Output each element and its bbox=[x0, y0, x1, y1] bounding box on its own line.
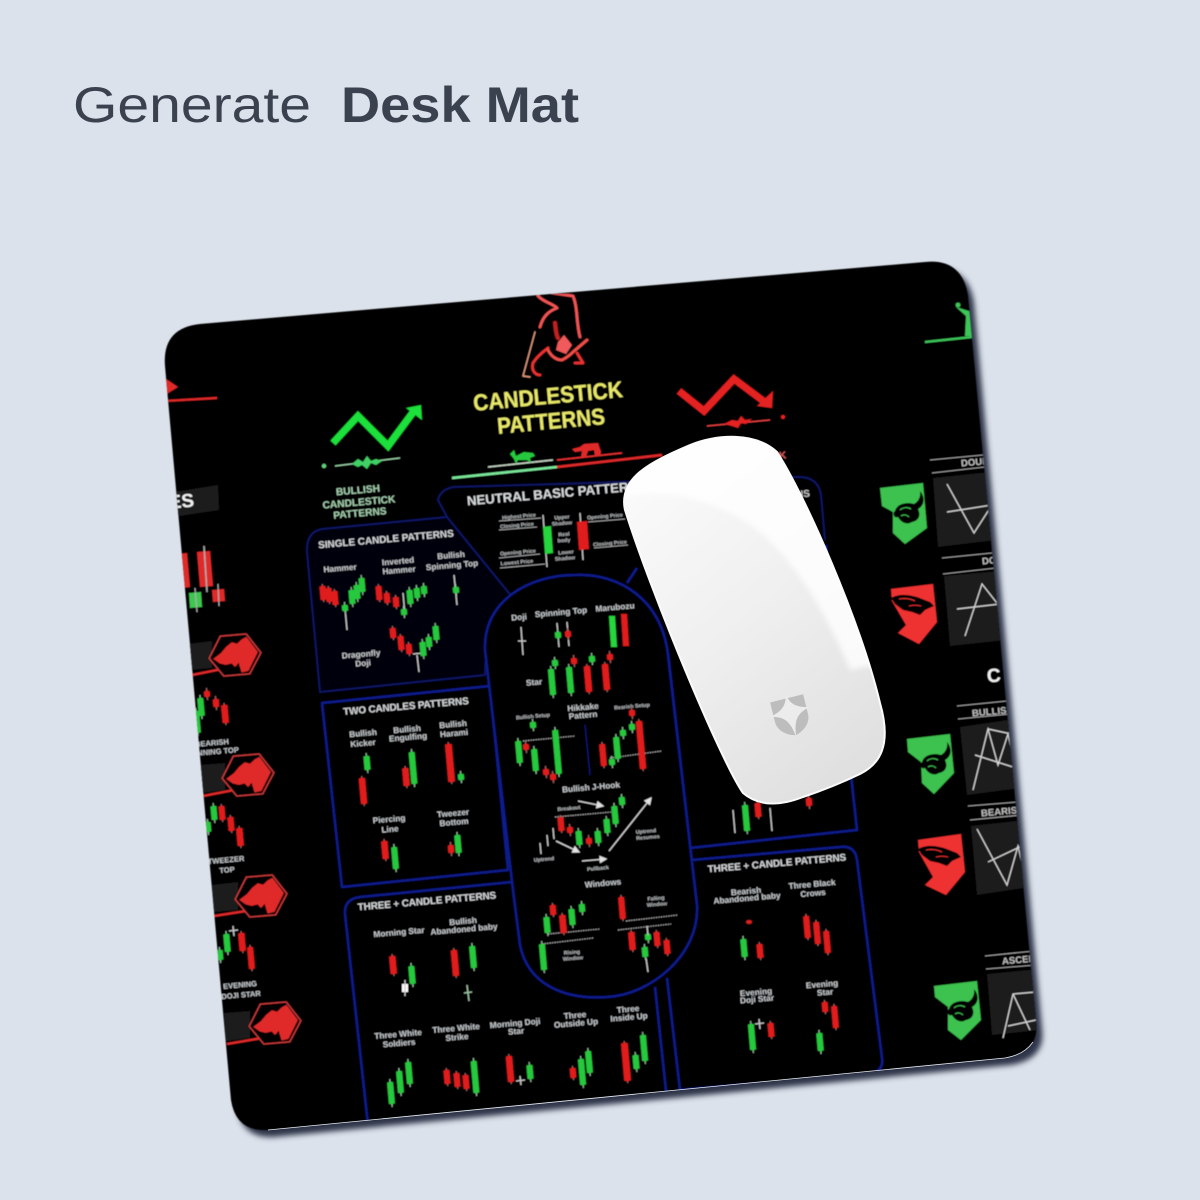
candles bbox=[740, 914, 839, 1054]
right edge: shield badges bbox=[880, 483, 981, 1040]
panel: three + candle patterns right bbox=[667, 847, 882, 1090]
pattern labels: Marubozu bbox=[595, 600, 635, 614]
pattern labels: Evening bbox=[805, 978, 839, 990]
candles: doji, spinning top, marubozu, star bbox=[518, 614, 629, 698]
pattern labels: Morning Star bbox=[373, 925, 426, 939]
right edge: chart pattern cards: BEARISH bbox=[981, 805, 1025, 819]
desk mat bbox=[150, 250, 1060, 1150]
candles: hikkake bbox=[515, 707, 662, 783]
heading: three candle: THREE + CANDLE PATTERNS bbox=[357, 890, 497, 914]
pattern labels: Hikkake bbox=[567, 701, 599, 713]
pattern labels: Abandoned baby bbox=[713, 890, 781, 906]
candle anatomy labels: Closing Price bbox=[500, 522, 534, 530]
candle anatomy labels: Lower bbox=[558, 549, 574, 557]
mat bottom edge highlight bbox=[268, 1042, 1033, 1130]
left edge: heading fragment bbox=[176, 484, 220, 516]
candle anatomy labels: Closing Price bbox=[593, 540, 627, 548]
pattern labels: Piercing bbox=[372, 813, 406, 825]
pattern labels: Soldiers bbox=[382, 1037, 416, 1049]
pattern labels: Resumes bbox=[636, 834, 660, 842]
heading: neutral basic: NEUTRAL BASIC PATTERNS bbox=[466, 478, 647, 508]
right edge: chart pattern cards: C bbox=[986, 665, 1002, 687]
left edge: candle groups and labels: TWEEZER bbox=[207, 854, 245, 866]
pattern labels bbox=[373, 915, 648, 1049]
left edge: candle groups and labels: EVENING bbox=[223, 979, 257, 991]
label: bullish candlestick patterns bbox=[322, 484, 396, 522]
pattern labels: Rising bbox=[564, 949, 580, 957]
pattern labels: Line bbox=[381, 823, 399, 835]
pattern labels: Hammer bbox=[323, 562, 358, 574]
left edge: candle groups and labels bbox=[185, 688, 262, 1001]
pattern labels: Kicker bbox=[350, 737, 377, 749]
candle anatomy labels: Shadow bbox=[552, 520, 573, 528]
pattern labels: Strike bbox=[445, 1031, 469, 1043]
candles bbox=[319, 575, 460, 672]
pattern labels: Bottom bbox=[439, 816, 469, 828]
heading: single candle: SINGLE CANDLE PATTERNS bbox=[318, 529, 455, 551]
label: bullish candlestick patterns: PATTERNS bbox=[333, 506, 387, 522]
candle anatomy labels: Opening Price bbox=[587, 512, 623, 522]
left edge: bearish candle group 1 bbox=[179, 546, 225, 612]
pattern labels: Spinning Top bbox=[425, 558, 479, 572]
left edge: candle groups and labels: SPINNING TOP bbox=[185, 745, 239, 759]
pattern labels: Bullish J-Hook bbox=[562, 779, 621, 795]
pattern labels: Crows bbox=[800, 887, 826, 899]
candle anatomy labels: Highest Price bbox=[502, 513, 536, 521]
pattern labels: Harami bbox=[440, 727, 468, 739]
anatomy candles bbox=[543, 513, 589, 567]
divider with bull and bear bbox=[452, 443, 662, 478]
title: Generate bbox=[73, 77, 311, 133]
left edge: bear badges bbox=[188, 633, 303, 1045]
heading: three candle right: THREE + CANDLE PATTERNS bbox=[707, 852, 847, 876]
pattern labels: Spinning Top bbox=[534, 605, 588, 619]
candle anatomy labels: Lowest Price bbox=[500, 559, 534, 567]
pattern labels: Breakout bbox=[557, 805, 581, 813]
right edge: chart pattern cards: DOUBLE bbox=[961, 455, 1002, 469]
pattern labels: Star bbox=[508, 1025, 525, 1037]
pattern labels: Dragonfly bbox=[341, 647, 381, 661]
pattern labels: Engulfing bbox=[389, 730, 427, 744]
pattern labels: Three White bbox=[374, 1027, 422, 1041]
candle anatomy labels bbox=[499, 512, 628, 568]
pattern labels: Star bbox=[817, 986, 834, 998]
pattern labels bbox=[349, 718, 470, 835]
pattern labels: Bullish bbox=[437, 549, 465, 561]
candles bbox=[733, 795, 813, 834]
panel: neutral basic patterns bbox=[438, 477, 825, 568]
right edge: chart pattern cards bbox=[930, 455, 1060, 1038]
central bear figure bbox=[523, 292, 587, 377]
right edge: top bull icon bbox=[925, 303, 972, 342]
left edge: heading fragment: ES bbox=[168, 491, 195, 514]
candles bbox=[387, 943, 648, 1107]
heading: candlestick patterns: CANDLESTICK bbox=[472, 376, 624, 416]
heading: two candles: TWO CANDLES PATTERNS bbox=[343, 696, 470, 718]
candle anatomy labels: Upper bbox=[554, 514, 570, 522]
pattern labels: Morning Doji bbox=[489, 1016, 541, 1030]
arrow: bullish trend bbox=[322, 405, 422, 469]
pattern labels: Bullish bbox=[449, 915, 477, 927]
candle anatomy labels: Real bbox=[558, 531, 570, 538]
pattern labels: Abandoned baby bbox=[430, 921, 498, 937]
pattern labels: Doji Star bbox=[740, 992, 775, 1005]
right edge: chart pattern cards: ASCENDING bbox=[1002, 952, 1060, 967]
pattern labels: Bullish bbox=[349, 727, 377, 739]
pattern labels: Pattern bbox=[568, 709, 598, 721]
panel: single candle patterns bbox=[307, 517, 513, 692]
mouse body bbox=[624, 437, 885, 804]
arrow: bearish trend: CANDLESTICK bbox=[713, 450, 787, 468]
right edge: chart pattern cards: BULLISH bbox=[972, 705, 1014, 719]
left edge: candle groups and labels: TOP bbox=[219, 865, 235, 875]
label: bullish candlestick patterns: BULLISH bbox=[336, 484, 380, 498]
pattern labels: Star bbox=[526, 676, 543, 688]
left edge: candle groups and labels: DOJI STAR bbox=[221, 989, 262, 1001]
pattern labels: Bullish bbox=[393, 723, 421, 735]
pattern labels: Falling bbox=[647, 895, 665, 903]
candles: windows bbox=[539, 895, 678, 973]
pattern labels: Doji bbox=[355, 657, 371, 669]
pattern labels: Evening bbox=[739, 986, 773, 998]
label: bullish candlestick patterns: CANDLESTICK bbox=[322, 494, 396, 512]
pattern labels: Pullback bbox=[587, 865, 609, 873]
pattern labels: Bullish Setup bbox=[516, 712, 551, 721]
mat shadow bbox=[171, 269, 1042, 1137]
pattern labels: Bearish bbox=[730, 885, 762, 897]
pattern labels: Bearish Setup bbox=[614, 702, 651, 712]
pattern labels: Three bbox=[616, 1003, 640, 1015]
heading: candlestick patterns: PATTERNS bbox=[496, 403, 606, 439]
pattern labels: Hammer bbox=[382, 564, 417, 576]
pattern labels: Tweezer bbox=[437, 807, 470, 819]
pattern labels: Inverted bbox=[381, 555, 415, 567]
pattern labels: Inside Up bbox=[610, 1010, 648, 1024]
pattern labels: Window bbox=[563, 955, 584, 963]
mouse highlight bbox=[620, 420, 900, 670]
candle anatomy labels: Shadow bbox=[555, 555, 576, 563]
pattern labels bbox=[713, 877, 839, 1005]
pattern labels: Windows bbox=[584, 876, 622, 890]
panel: bearish right upper bbox=[627, 488, 857, 848]
candle anatomy labels: body bbox=[557, 537, 571, 545]
left edge: red arrow bbox=[166, 378, 218, 403]
mouse bbox=[620, 420, 900, 804]
candle anatomy labels: Opening Price bbox=[500, 548, 536, 558]
pattern labels bbox=[511, 600, 668, 963]
pattern labels bbox=[323, 549, 479, 669]
arrow: bearish trend bbox=[679, 379, 787, 468]
pattern labels: Uptrend bbox=[636, 828, 656, 836]
pattern labels: Window bbox=[647, 901, 668, 909]
pattern labels: Three bbox=[563, 1009, 587, 1021]
heading fragment: PATTERNS bbox=[757, 488, 811, 504]
title bbox=[73, 77, 579, 133]
panel: three + candle patterns left bbox=[345, 882, 667, 1125]
panel: central patterns capsule bbox=[485, 575, 697, 997]
title: Desk Mat bbox=[341, 77, 579, 133]
pattern labels: Uptrend bbox=[534, 856, 554, 864]
pattern labels: Bullish bbox=[439, 718, 467, 730]
icon: mouse logo bbox=[766, 688, 816, 742]
pattern labels: Three Black bbox=[788, 877, 836, 891]
left edge: candle groups and labels: BEARISH bbox=[195, 737, 229, 749]
heading: candlestick patterns bbox=[473, 380, 624, 435]
pattern labels: Doji bbox=[511, 611, 527, 623]
chart: bullish j-hook bbox=[540, 794, 651, 861]
panel: two candles patterns bbox=[322, 686, 508, 887]
candles bbox=[359, 742, 465, 872]
pattern labels: Three White bbox=[432, 1021, 480, 1035]
pattern labels: Outside Up bbox=[554, 1016, 598, 1030]
right edge: chart pattern cards: DOUBLE bbox=[982, 553, 1023, 567]
